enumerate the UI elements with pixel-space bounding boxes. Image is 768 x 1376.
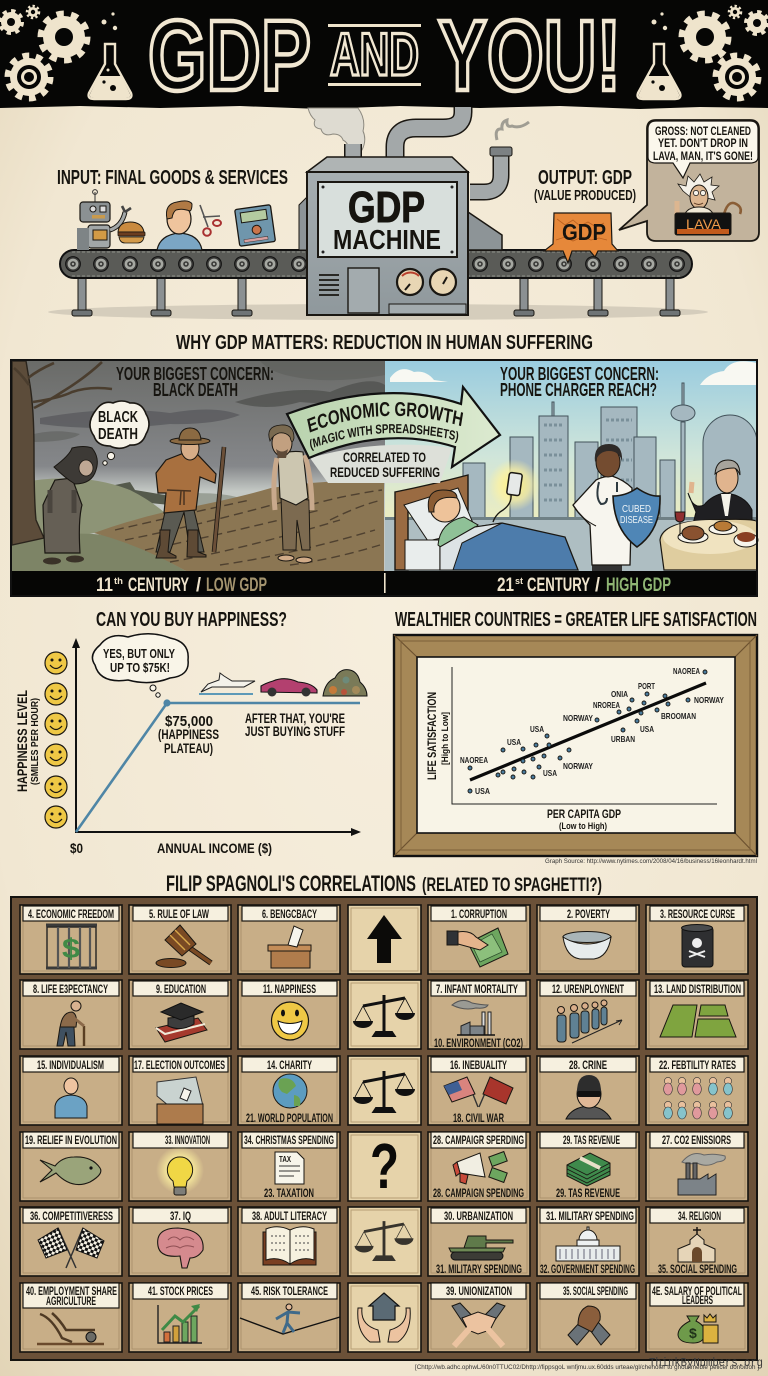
icon: scientist in lava: LAVA bbox=[686, 216, 722, 232]
cell: 1 corruption: 1. CORRUPTION bbox=[451, 909, 507, 921]
steam right bbox=[496, 120, 529, 140]
text: concern, phone charger: YOUR BIGGEST CONCERN: bbox=[500, 363, 659, 384]
cell: 19 belief in evolution: 19. RELIEF IN EVOLUTION bbox=[25, 1135, 117, 1147]
data labels: USA bbox=[530, 724, 544, 734]
cell: 14 charity / 21 population bbox=[238, 1056, 340, 1125]
cell: 31 military / 32 government: 32. GOVERNMENT SPENDING bbox=[540, 1264, 635, 1276]
cell: 7 infant mortality / 10 environment: 10. ENVIRONMENT (CO2) bbox=[434, 1038, 523, 1050]
output heading: (VALUE PRODUCED) bbox=[534, 188, 636, 204]
header banner bbox=[0, 0, 768, 112]
cell: 29 tax revenue: 29. TAS REVENUE bbox=[563, 1135, 620, 1147]
data labels: NORWAY bbox=[694, 695, 724, 705]
cell: 28 campaign spending: 28. CAMPAIGR SPERDING bbox=[433, 1135, 524, 1147]
gauges bbox=[397, 269, 456, 295]
caption bar: th bbox=[114, 576, 123, 586]
cell: 28 campaign spending: 28. CAMPAIGN SPENDING bbox=[433, 1188, 524, 1200]
panel: left scene, low GDP bbox=[12, 361, 385, 571]
pipes bbox=[342, 107, 512, 192]
data labels: NAOREA bbox=[673, 666, 700, 676]
heading: can you buy happiness: CAN YOU BUY HAPPINESS? bbox=[96, 609, 287, 631]
text: concern, black death: YOUR BIGGEST CONCERN: bbox=[116, 363, 274, 384]
text: concern, phone charger bbox=[500, 363, 659, 400]
chart: happiness vs income bbox=[14, 634, 367, 856]
title: GDP AND YOU! bbox=[148, 0, 621, 112]
scatter axis labels: PER CAPITA GDP bbox=[547, 809, 621, 821]
scatter axis labels: LIFE SATISFACTION bbox=[425, 692, 439, 780]
cell: 4 economic freedom bbox=[20, 905, 122, 974]
annotation: after that: JUST BUYING STUFF bbox=[245, 724, 345, 739]
cell: 19 belief in evolution bbox=[20, 1132, 122, 1201]
thought bubble: black death: BLACK bbox=[98, 409, 139, 426]
cell: 12 unemployment bbox=[537, 980, 639, 1049]
cell: 4 economic freedom: 4. ECONOMIC FREEDOM bbox=[28, 909, 114, 921]
panel: right scene, high GDP bbox=[385, 361, 758, 571]
caption bar: CENTURY bbox=[128, 575, 189, 596]
cell: 41 stock prices: 41. STOCK PRICES bbox=[148, 1286, 213, 1298]
cell: 11 happiness bbox=[238, 980, 340, 1049]
data labels: USA bbox=[507, 737, 521, 747]
icon: barber person bbox=[157, 201, 221, 250]
caption bar: st bbox=[515, 576, 523, 586]
cell: 9 education bbox=[129, 980, 231, 1049]
cell: up arrow bbox=[348, 905, 421, 974]
cell: 17 election outcomes bbox=[129, 1056, 231, 1125]
cell: 45 risk tolerance bbox=[238, 1283, 340, 1352]
cell: 41 stock prices bbox=[129, 1283, 231, 1352]
cell: 30 urbanization / 31 military: 31. MILITARY SPENDING bbox=[436, 1264, 522, 1276]
thought bubble: black death bbox=[90, 401, 149, 465]
cell: 15 individualism bbox=[20, 1056, 122, 1125]
icon: bare tree bbox=[12, 361, 112, 545]
icon: gadget bbox=[235, 205, 275, 246]
cell: 34 christmas spending / 23 taxation bbox=[238, 1132, 340, 1201]
cell: 20 crime: 28. CRINE bbox=[569, 1060, 607, 1072]
input heading: INPUT: FINAL GOODS & SERVICES bbox=[57, 167, 288, 189]
output heading: OUTPUT: GDP bbox=[538, 167, 632, 189]
cell: 36 competitiveness: 36. COMPETITIVERESS bbox=[30, 1211, 113, 1223]
cell: 13 land distribution bbox=[646, 980, 748, 1049]
cell: 40 employment share agriculture bbox=[20, 1283, 122, 1352]
icon: glowing phone bbox=[488, 459, 540, 522]
cell: 15 individualism: 15. INDIVIDUALISM bbox=[37, 1060, 104, 1072]
cell: 14 charity / 21 population: 14. CHARITY bbox=[267, 1060, 312, 1072]
data labels: BROOMAN bbox=[661, 711, 696, 721]
icon: bed with boy bbox=[395, 475, 578, 570]
conveyor legs bbox=[72, 278, 680, 316]
cell: 36 competitiveness bbox=[20, 1207, 122, 1276]
caption bar: / bbox=[595, 575, 601, 596]
reduced suffering label backing bbox=[310, 445, 452, 483]
data labels: NAOREA bbox=[460, 755, 488, 765]
thought bubble bbox=[92, 634, 188, 697]
cell: 16 inequality / 18 civil war bbox=[428, 1056, 530, 1125]
caption bar: LOW GDP bbox=[206, 575, 267, 596]
cell: scales bbox=[348, 980, 421, 1049]
annotation: 75000 plateau: $75,000 bbox=[165, 713, 213, 730]
text: concern, black death: BLACK DEATH bbox=[153, 379, 238, 400]
cell: balance with coins bbox=[348, 1207, 421, 1276]
icon: shield: DISEASE bbox=[620, 514, 653, 526]
cell: salary of political leaders: LEADERS bbox=[682, 1295, 713, 1307]
icon: doctor bbox=[573, 444, 632, 571]
machine label: MACHINE bbox=[333, 224, 441, 255]
cell: 6 democracy: 6. BENGCBACY bbox=[262, 909, 317, 921]
icon: beggar bbox=[269, 425, 312, 563]
text: correlated to reduced suffering: REDUCED SUFFERING bbox=[330, 464, 440, 480]
cell: 34 christmas spending / 23 taxation: 34. CHRISTMAS SPENDING bbox=[244, 1135, 334, 1147]
gdp machine section bbox=[48, 107, 759, 320]
cell: 34 christmas spending / 23 taxation: TAX bbox=[279, 1155, 292, 1164]
title: GDP AND YOU!: GDP bbox=[148, 0, 311, 112]
data labels: NORWAY bbox=[563, 761, 593, 771]
icon: melting GDP block: GDP bbox=[562, 219, 606, 245]
cell: 14 charity / 21 population: 21. WORLD POPULATION bbox=[246, 1113, 333, 1125]
data labels: PORT bbox=[638, 681, 656, 691]
cell: question mark: ? bbox=[370, 1130, 399, 1202]
panel: correlations table bbox=[11, 897, 757, 1360]
machine label bbox=[333, 183, 441, 255]
text: concern, black death bbox=[116, 363, 274, 400]
cell: 37 iq: 37. IQ bbox=[170, 1211, 191, 1223]
annotation: 75000 plateau: PLATEAU) bbox=[164, 741, 213, 756]
cell: 6 democracy bbox=[238, 905, 340, 974]
y axis label: (SMILES PER HOUR) bbox=[30, 698, 41, 785]
axes and trend line bbox=[452, 667, 717, 804]
caption bar: 11 bbox=[96, 575, 113, 596]
icon: yacht bbox=[199, 673, 255, 694]
data labels bbox=[460, 666, 724, 796]
scatter axis labels: [High to Low] bbox=[440, 712, 450, 765]
cell: 2 poverty bbox=[537, 905, 639, 974]
caption bar: / bbox=[196, 575, 202, 596]
data labels: URBAN bbox=[611, 734, 635, 744]
cell: 20 crime bbox=[537, 1056, 639, 1125]
machine label: GDP bbox=[348, 183, 425, 232]
data labels: USA bbox=[543, 768, 557, 778]
icon: old woman bbox=[43, 446, 97, 564]
icon: pink car bbox=[261, 679, 317, 696]
arrow: economic growth bbox=[286, 384, 502, 470]
x axis labels bbox=[70, 840, 272, 856]
cell: 45 risk tolerance: 45. RISK TOLERANCE bbox=[251, 1286, 328, 1298]
cell: 31 military / 32 government: 31. MILITARY SPENDING bbox=[546, 1211, 634, 1223]
data points bbox=[468, 670, 707, 793]
machine body bbox=[299, 157, 502, 315]
cell: 27 co2 emissions bbox=[646, 1132, 748, 1201]
icon: shield: CUBED bbox=[622, 503, 651, 515]
chart: framed scatter plot bbox=[394, 635, 757, 856]
heading: Filip Spagnoli's correlations: FILIP SPAGNOLI'S CORRELATIONS bbox=[166, 871, 416, 896]
cell: 35 social spending: 35. SOCIAL SPENDING bbox=[563, 1286, 628, 1298]
arrow: economic growth: (MAGIC WITH SPREADSHEETS) bbox=[310, 424, 458, 451]
cell: 22 fertility rates bbox=[646, 1056, 748, 1125]
cell: 33 innovation: 33. INNOVATION bbox=[165, 1135, 210, 1147]
cell: 40 employment share agriculture: AGRICULTURE bbox=[46, 1296, 96, 1308]
icon: farmer bbox=[156, 428, 224, 558]
cell: 29 tax revenue: 29. TAS REVENUE bbox=[556, 1188, 620, 1200]
icon: robot with burger bbox=[77, 190, 145, 250]
cell: 8 life expectancy: 8. LIFE E3PECTANCY bbox=[33, 984, 108, 996]
axes bbox=[72, 638, 361, 836]
cell: salary of political leaders bbox=[646, 1283, 748, 1352]
cell: 28 campaign spending bbox=[428, 1132, 530, 1201]
cell: 35 social spending bbox=[537, 1283, 639, 1352]
wood frame bbox=[394, 635, 757, 856]
cell: 30 urbanization / 31 military bbox=[428, 1207, 530, 1276]
x axis labels: ANNUAL INCOME ($) bbox=[157, 840, 272, 856]
cell: 8 life expectancy bbox=[20, 980, 122, 1049]
annotation: 75000 plateau bbox=[158, 713, 219, 756]
cell: 40 employment share agriculture: 40. EMPLOYMENT SHARE bbox=[26, 1286, 117, 1298]
source note: Graph Source: http://www.nytimes.com/2008/04/16/business/16leonhardt.html bbox=[545, 859, 757, 865]
cell: 39 unionization: 39. UNIONIZATION bbox=[446, 1286, 512, 1298]
cell: 34 religion: 34. RELIGION bbox=[678, 1211, 721, 1223]
icon: right flask bbox=[638, 12, 680, 99]
thought bubble: YES, BUT ONLY bbox=[103, 646, 175, 661]
cell: 38 adult literacy: 38. ADULT LITERACY bbox=[252, 1211, 327, 1223]
cell: salary of political leaders: $ bbox=[689, 1325, 697, 1341]
cell: 5 rule of law bbox=[129, 905, 231, 974]
speech bubble: lava warning bbox=[619, 120, 759, 241]
cell: 1 corruption bbox=[428, 905, 530, 974]
data labels: USA bbox=[640, 724, 654, 734]
cell: 34 christmas spending / 23 taxation: 23. TAXATION bbox=[264, 1188, 314, 1200]
annotation: 75000 plateau: (HAPPINESS bbox=[158, 727, 219, 742]
y axis label: HAPPINESS LEVEL bbox=[14, 690, 30, 792]
icon: pile of stuff bbox=[323, 670, 367, 696]
y axis label bbox=[14, 690, 41, 792]
cell: 34 religion bbox=[646, 1207, 748, 1276]
data labels: ONIA bbox=[611, 689, 628, 699]
heading: Filip Spagnoli's correlations: (RELATED TO SPAGHETTI?) bbox=[422, 875, 602, 896]
cell: 33 innovation bbox=[129, 1132, 231, 1201]
cell: 30 urbanization / 31 military: 30. URBANIZATION bbox=[444, 1211, 513, 1223]
cell: balance bbox=[348, 1056, 421, 1125]
annotation: after that: AFTER THAT, YOU'RE bbox=[245, 711, 345, 726]
footer source: [Chttp://wb.adhc.ophwL/60n0TTUC02/Dhttp://fippsgoL wnfjmu.ux.60dds urteae/gl/cheholer to gnoulimeble pelicer donoitfon ] bbox=[415, 1365, 759, 1371]
cell: 17 election outcomes: 17. ELECTION OUTCOMES bbox=[134, 1060, 225, 1072]
scatter axis labels: (Low to High) bbox=[559, 821, 607, 831]
caption bar: CENTURY bbox=[527, 575, 590, 596]
cell: house in hands bbox=[348, 1283, 421, 1352]
text: correlated to reduced suffering bbox=[330, 449, 440, 480]
x axis labels: $0 bbox=[70, 840, 83, 856]
icon: right gears bbox=[682, 6, 768, 98]
cell: 38 adult literacy bbox=[238, 1207, 340, 1276]
thought bubble: black death: DEATH bbox=[98, 426, 138, 443]
income curve bbox=[76, 699, 360, 832]
cell: 12 unemployment: 12. URENPLOYNENT bbox=[552, 984, 624, 996]
cell: 3 resource curse bbox=[646, 905, 748, 974]
smoke left bbox=[308, 108, 365, 150]
title: GDP AND YOU!: AND bbox=[330, 21, 419, 88]
cell: 5 rule of law: 5. RULE OF LAW bbox=[149, 909, 209, 921]
arrow: economic growth: ECONOMIC GROWTH bbox=[307, 402, 464, 432]
output heading bbox=[534, 167, 636, 204]
title: GDP AND YOU!: YOU! bbox=[438, 0, 621, 112]
panel: 11th vs 21st century bbox=[10, 359, 758, 597]
cell: 27 co2 emissions: 27. CO2 ENISSIORS bbox=[662, 1135, 731, 1147]
cell: 16 inequality / 18 civil war: 16. INEBUALITY bbox=[450, 1060, 507, 1072]
icon: melting GDP block bbox=[544, 213, 618, 263]
heading: why GDP matters: WHY GDP MATTERS: REDUCTION IN HUMAN SUFFERING bbox=[176, 332, 593, 354]
icon: wealthy diner bbox=[660, 460, 758, 570]
data labels: NORWAY bbox=[563, 713, 593, 723]
text: concern, phone charger: PHONE CHARGER REACH? bbox=[500, 379, 657, 400]
cell: 2 poverty: 2. POVERTY bbox=[567, 909, 610, 921]
table with food bbox=[660, 519, 757, 570]
scatter axis labels bbox=[425, 692, 621, 831]
icon: shield bbox=[613, 488, 660, 547]
cell: 29 tax revenue bbox=[537, 1132, 639, 1201]
cell: 16 inequality / 18 civil war: 18. CIVIL WAR bbox=[453, 1113, 504, 1125]
cell: question mark bbox=[348, 1130, 421, 1202]
thought bubble: UP TO $75K! bbox=[110, 660, 170, 675]
smiley scale bbox=[45, 652, 67, 828]
data labels: NROREA bbox=[593, 700, 620, 710]
caption bar: 21 bbox=[497, 575, 514, 596]
cell: 7 infant mortality / 10 environment: 7. INFANT MORTALITY bbox=[436, 984, 518, 996]
text: correlated to reduced suffering: CORRELATED TO bbox=[343, 449, 426, 465]
cell: 9 education: 9. EDUCATION bbox=[156, 984, 206, 996]
cell: 11 happiness: 11. NAPPINESS bbox=[263, 984, 316, 996]
caption bar: HIGH GDP bbox=[606, 575, 671, 596]
ground shadow bbox=[48, 304, 708, 320]
cell: 39 unionization bbox=[428, 1283, 530, 1352]
icon: left gears bbox=[0, 6, 87, 98]
cell: 37 iq bbox=[129, 1207, 231, 1276]
data labels: USA bbox=[475, 786, 490, 796]
cell: 7 infant mortality / 10 environment bbox=[428, 980, 530, 1050]
annotation: after that bbox=[245, 711, 345, 739]
cell: 4 economic freedom: $ bbox=[62, 933, 80, 964]
cell: 31 military / 32 government bbox=[537, 1207, 639, 1276]
caption bar bbox=[11, 571, 757, 596]
icon: left flask bbox=[89, 12, 131, 99]
conveyor belt bbox=[60, 250, 692, 278]
